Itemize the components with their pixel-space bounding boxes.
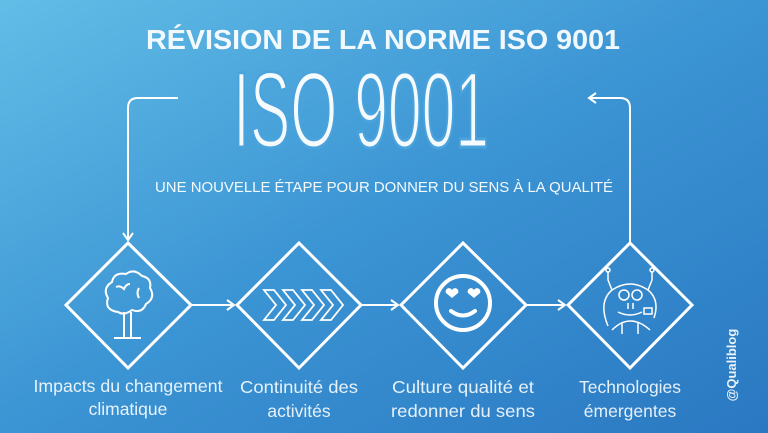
step 2: continuity: activités [267, 401, 331, 421]
caption 3: Culture qualité et [392, 377, 534, 397]
arrow: right loop [589, 93, 630, 243]
diamond 4 [568, 243, 692, 368]
arrow: left loop [123, 98, 178, 240]
caption 2: Continuité des [240, 377, 358, 397]
icon: smiley with heart eyes [436, 276, 490, 330]
step 4: technologies: émergentes [584, 401, 676, 421]
diamond 2 [237, 243, 361, 368]
icon: chevrons [264, 290, 343, 320]
subtitle: UNE NOUVELLE ÉTAPE POUR DONNER DU SENS À LA QUALITÉ [155, 179, 613, 196]
step 2: continuity [237, 243, 361, 421]
title: RÉVISION DE LA NORME ISO 9001 [146, 24, 620, 55]
step 4: technologies [568, 243, 692, 421]
icon: robot [604, 268, 656, 334]
step 1: climate [34, 243, 223, 419]
watermark: @Qualiblog [724, 329, 739, 401]
step 3: quality culture [391, 243, 535, 421]
diamond 1 [66, 243, 191, 368]
step 1: climate: climatique [89, 399, 167, 419]
diamond 3 [401, 243, 526, 368]
connector arrows [192, 300, 565, 310]
big heading ISO 9001: ISO 9001 [233, 49, 489, 170]
caption 1: Impacts du changement [34, 376, 223, 396]
icon: tree [106, 271, 152, 338]
caption 4: Technologies [579, 377, 681, 397]
step 3: quality culture: redonner du sens [391, 401, 535, 421]
